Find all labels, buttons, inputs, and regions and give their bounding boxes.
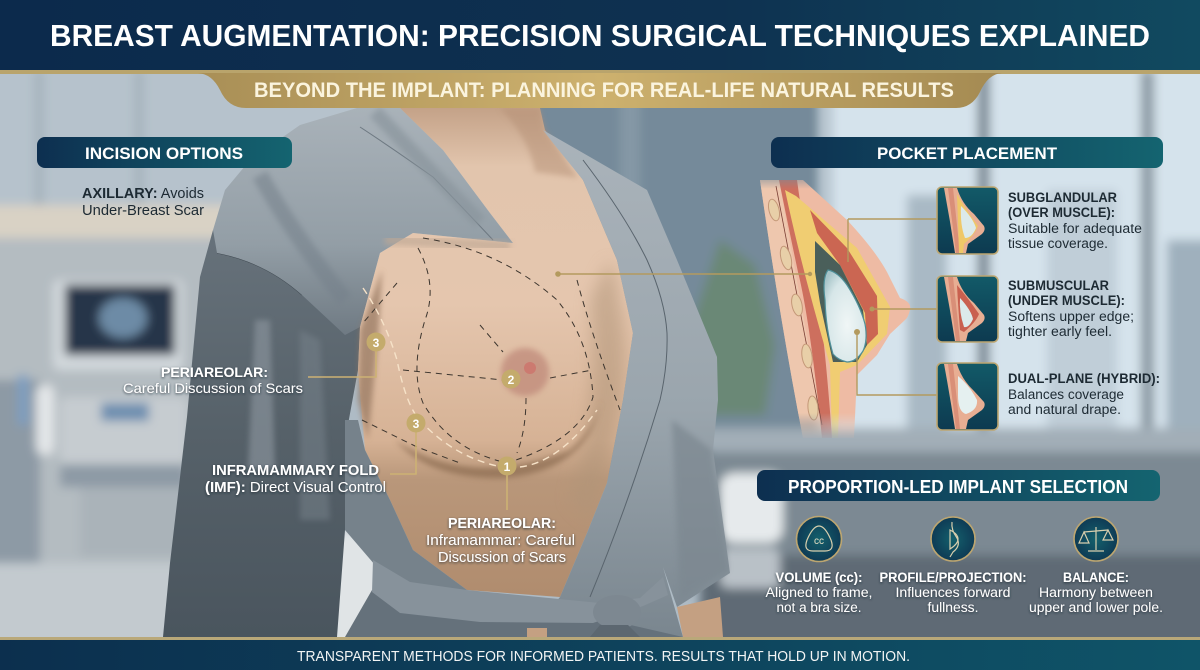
text: profile bbox=[880, 570, 1026, 615]
heading: pocket placement bbox=[771, 137, 1163, 168]
subtitle ribbon: BEYOND THE IMPLANT: PLANNING FOR REAL-LIFE NATURAL RESULTS bbox=[254, 79, 954, 102]
text: submuscular: tighter early feel. bbox=[1008, 324, 1112, 339]
marker 1: 1 bbox=[504, 460, 511, 474]
text: subglandular: (OVER MUSCLE): bbox=[1008, 205, 1115, 220]
heading: implant selection: PROPORTION-LED IMPLANT SELECTION bbox=[788, 477, 1128, 497]
text: periareolar bottom bbox=[426, 516, 575, 566]
marker 3 lower bbox=[390, 414, 426, 474]
text: dual-plane: Balances coverage bbox=[1008, 387, 1124, 402]
shoulder and left collar bbox=[213, 108, 513, 335]
figure: robe and chest clinical schematic bbox=[163, 108, 730, 637]
marker 3 lower: 3 bbox=[413, 417, 420, 431]
text: axillary: Under-Breast Scar bbox=[82, 203, 204, 219]
text: subglandular: tissue coverage. bbox=[1008, 236, 1108, 251]
text: dual-plane: DUAL-PLANE (HYBRID): bbox=[1008, 371, 1160, 386]
marker 1 bbox=[498, 456, 516, 510]
icon: profile projection bbox=[931, 517, 975, 561]
icon: volume cc: cc bbox=[814, 536, 824, 547]
text: periareolar left: PERIAREOLAR: bbox=[161, 364, 268, 380]
text: subglandular bbox=[1008, 190, 1142, 251]
text: periareolar bottom: Inframammar: Careful bbox=[426, 533, 575, 549]
inset: subglandular bbox=[937, 187, 998, 254]
text: submuscular: Softens upper edge; bbox=[1008, 309, 1134, 324]
icon: volume cc bbox=[796, 516, 842, 562]
heading: incision options: INCISION OPTIONS bbox=[85, 144, 243, 163]
text: submuscular: (UNDER MUSCLE): bbox=[1008, 293, 1125, 308]
text: balance: BALANCE: bbox=[1063, 570, 1129, 585]
surgical dashed markings bbox=[362, 238, 620, 463]
text: volume bbox=[766, 570, 872, 615]
text: periareolar left: Careful Discussion of Scars bbox=[123, 380, 303, 396]
text: periareolar bottom: Discussion of Scars bbox=[438, 550, 566, 566]
marker 3 upper: 3 bbox=[373, 336, 380, 350]
panel: implant selection bbox=[757, 470, 1163, 615]
text: volume: not a bra size. bbox=[776, 600, 862, 615]
text: balance bbox=[1029, 570, 1163, 615]
inset: dual-plane bbox=[937, 363, 998, 430]
robe skirt bbox=[345, 590, 683, 637]
text: volume: VOLUME (cc): bbox=[776, 570, 862, 585]
text: volume: Aligned to frame, bbox=[766, 585, 872, 600]
marker 3 upper bbox=[308, 332, 386, 377]
text: balance: upper and lower pole. bbox=[1029, 600, 1163, 615]
nipple landmark bbox=[524, 362, 536, 374]
left sleeve bbox=[163, 230, 360, 637]
panel: incision options bbox=[37, 137, 575, 566]
areola landmark bbox=[501, 348, 549, 396]
icon: balance scale bbox=[1074, 517, 1118, 561]
heading: pocket placement: POCKET PLACEMENT bbox=[877, 144, 1058, 163]
subtitle ribbon bbox=[198, 73, 1002, 108]
text: inframammary fold: (IMF): Direct Visual Control bbox=[205, 480, 386, 496]
text: inframammary fold: INFRAMAMMARY FOLD bbox=[212, 463, 379, 479]
right front of robe and sleeve bbox=[527, 130, 730, 637]
text: balance: Harmony between bbox=[1039, 585, 1153, 600]
text: inframammary fold bbox=[205, 463, 386, 496]
text: axillary: AXILLARY: Avoids bbox=[82, 186, 204, 202]
right forearm bbox=[677, 597, 723, 637]
title: BREAST AUGMENTATION: PRECISION SURGICAL TECHNIQUES EXPLAINED bbox=[50, 18, 1150, 53]
footer bar bbox=[0, 637, 1200, 670]
text: periareolar bottom: PERIAREOLAR: bbox=[448, 516, 556, 532]
heading: implant selection bbox=[757, 470, 1160, 501]
heading: incision options bbox=[37, 137, 292, 168]
text: subglandular: Suitable for adequate bbox=[1008, 221, 1142, 236]
text: submuscular: SUBMUSCULAR bbox=[1008, 278, 1109, 293]
chart: tissue cross-section bbox=[760, 180, 937, 438]
panel: pocket placement bbox=[555, 137, 1163, 438]
text: subglandular: SUBGLANDULAR bbox=[1008, 190, 1117, 205]
text: profile: Influences forward bbox=[896, 585, 1010, 600]
left front of robe bbox=[345, 420, 467, 590]
leader line to chest bbox=[555, 271, 812, 277]
header bar bbox=[0, 0, 1200, 74]
text: profile: fullness. bbox=[928, 600, 978, 615]
inset: submuscular bbox=[937, 276, 998, 342]
marker 2 bbox=[502, 370, 520, 388]
footer bar: TRANSPARENT METHODS FOR INFORMED PATIENTS. RESULTS THAT HOLD UP IN MOTION. bbox=[297, 649, 910, 665]
text: submuscular bbox=[1008, 278, 1134, 339]
text: periareolar left bbox=[123, 364, 303, 396]
skin area bbox=[358, 108, 633, 597]
text: axillary bbox=[82, 186, 204, 219]
marker 2: 2 bbox=[508, 373, 515, 387]
robe belt bbox=[372, 560, 668, 637]
neck and chest shading bbox=[358, 108, 625, 520]
text: profile: PROFILE/PROJECTION: bbox=[880, 570, 1026, 585]
text: dual-plane: and natural drape. bbox=[1008, 402, 1121, 417]
text: dual-plane bbox=[1008, 371, 1160, 417]
